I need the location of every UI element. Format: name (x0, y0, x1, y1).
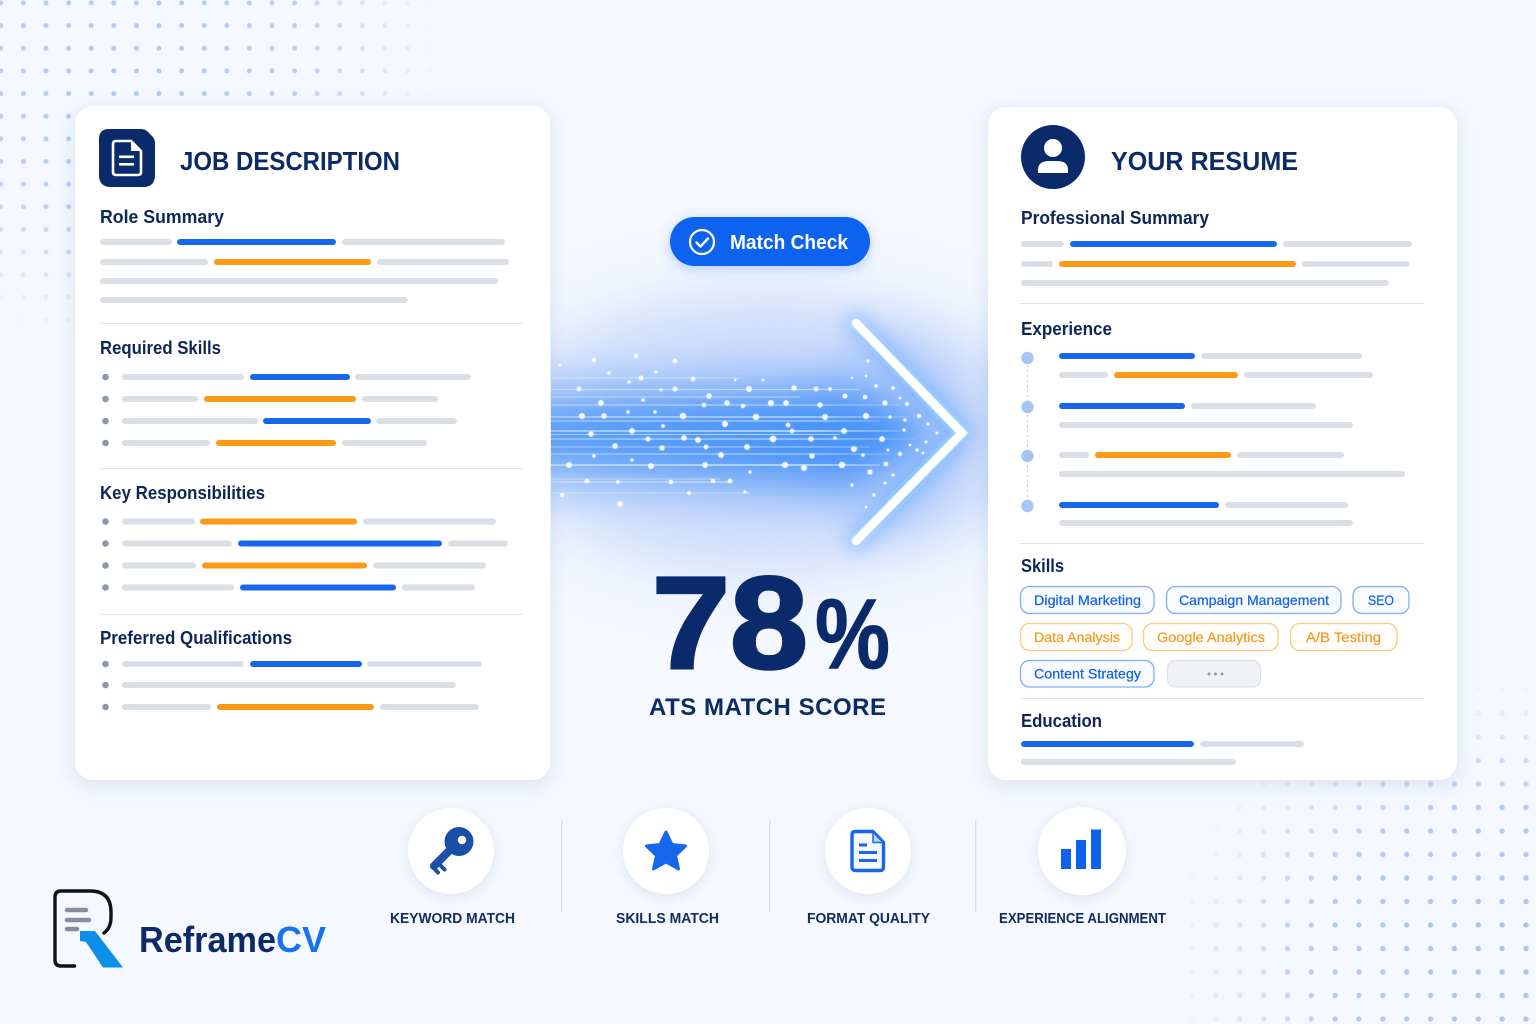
score: 78% (652, 549, 890, 696)
bullet list: required skills (102, 374, 471, 446)
chip: campaign management: Campaign Management (1179, 592, 1329, 608)
panel: job description (75, 106, 550, 780)
chip: google analytics: Google Analytics (1157, 629, 1265, 645)
icon: document (852, 832, 884, 870)
chip: digital marketing (1020, 586, 1154, 614)
chip: content strategy: Content Strategy (1034, 666, 1141, 682)
label: KEYWORD MATCH (390, 911, 515, 927)
metric: experience alignment (999, 807, 1166, 927)
divider lines between metrics (561, 820, 976, 912)
label: ats match score: ATS MATCH SCORE (649, 694, 886, 721)
section heading: skills: Skills (1021, 555, 1064, 576)
icon: job document (99, 129, 155, 187)
chip: a/b testing (1290, 624, 1397, 650)
timeline: experience (1021, 352, 1034, 512)
label: SKILLS MATCH (616, 911, 719, 927)
chip: content strategy (1020, 660, 1154, 687)
heading: your resume: YOUR RESUME (1111, 146, 1298, 176)
chip: a/b testing: A/B Testing (1306, 629, 1381, 645)
section heading: key responsibilities: Key Responsibilities (100, 482, 265, 503)
chip: digital marketing: Digital Marketing (1034, 592, 1141, 608)
logo mark (55, 891, 123, 968)
icon: key (434, 827, 474, 872)
section heading: professional summary: Professional Summary (1021, 207, 1210, 228)
wordmark: Reframe (139, 919, 276, 960)
section heading: experience: Experience (1021, 318, 1112, 339)
panel background (75, 106, 550, 780)
chip: more (1168, 660, 1260, 687)
section heading: preferred qualifications: Preferred Qualifications (100, 627, 292, 648)
logo: reframecv: CV (276, 919, 326, 960)
metric: keyword match (390, 808, 515, 927)
panel background (988, 107, 1457, 780)
icon: star (646, 832, 686, 869)
icon: bar chart (1061, 830, 1101, 869)
bullet list: preferred qualifications (102, 661, 482, 710)
chip: data analysis (1020, 624, 1132, 650)
section heading: education: Education (1021, 710, 1102, 731)
icon: person (1021, 125, 1085, 189)
text lines: experience (1059, 353, 1405, 526)
heading: job description: JOB DESCRIPTION (180, 146, 400, 176)
skill chips (1020, 586, 1409, 687)
bullet list: key responsibilities (102, 518, 508, 591)
score: 78%: 78 (652, 549, 808, 696)
dot pattern: top left (0, 0, 410, 322)
metric: format quality (807, 808, 930, 927)
icon: check circle (690, 230, 714, 254)
section heading: role summary: Role Summary (100, 206, 225, 227)
panel: your resume (988, 107, 1457, 780)
arrow glow and data stream (500, 298, 1040, 568)
chip: seo (1353, 586, 1409, 614)
arrow chevron (856, 323, 962, 541)
chip: data analysis: Data Analysis (1034, 629, 1120, 645)
logo: reframecv (55, 891, 326, 968)
label: match check: Match Check (730, 232, 849, 254)
text lines: role summary (100, 239, 509, 303)
score: 78%: % (815, 578, 890, 689)
dot pattern: bottom right (1190, 711, 1529, 1022)
chip: google analytics (1144, 624, 1278, 650)
text lines: education (1021, 741, 1304, 765)
text lines: professional summary (1021, 241, 1412, 286)
section heading: required skills: Required Skills (100, 337, 221, 358)
match check button (670, 217, 870, 266)
label: FORMAT QUALITY (807, 911, 930, 927)
metric: skills match (616, 808, 719, 927)
chip: seo: SEO (1368, 592, 1394, 608)
chip: campaign management (1166, 586, 1341, 614)
label: EXPERIENCE ALIGNMENT (999, 911, 1166, 927)
